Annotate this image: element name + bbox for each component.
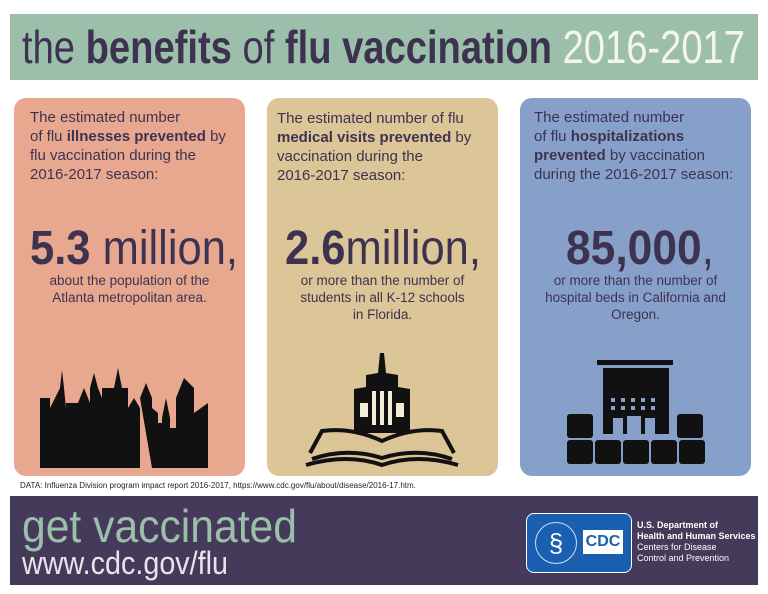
agency text: U.S. Department of — [637, 520, 718, 530]
header banner — [10, 14, 758, 80]
data source note: DATA: Influenza Division program impact report 2016-2017, https://www.cdc.gov/flu/about/disease/2016-17.htm. — [20, 481, 416, 490]
call to action and url — [21, 500, 297, 581]
text: hospitalizations question: during the 2016-2017 season: — [534, 166, 733, 183]
text: California comparison: hospital beds in California and — [545, 290, 726, 305]
logo: HHS CDC: CDC — [586, 533, 620, 550]
text: visits question: vaccination during the — [277, 148, 423, 165]
text: hospitalizations question: The estimated number — [534, 109, 684, 126]
text: Florida comparison: or more than the number of — [301, 273, 464, 288]
logo: HHS CDC: § — [549, 528, 563, 558]
logo: HHS CDC — [526, 513, 632, 573]
text: hospitalizations question — [534, 109, 733, 183]
text: visits question — [277, 110, 472, 184]
icon: hospital and beds — [567, 360, 705, 464]
call to action and url: get vaccinated — [22, 500, 297, 552]
stat: 2.6 million: 2.6million, — [285, 222, 481, 275]
panel: medical visits — [267, 98, 498, 476]
text: Atlanta comparison: Atlanta metropolitan area. — [52, 290, 207, 305]
text: hospitalizations question: of flu hospitalizations — [534, 128, 684, 145]
panel: hospitalizations — [520, 98, 751, 476]
text: visits question: 2016-2017 season: — [277, 167, 405, 184]
agency text: Centers for Disease — [637, 542, 717, 552]
text: Atlanta comparison — [50, 273, 209, 305]
text: Florida comparison: students in all K-12 schools — [300, 290, 465, 305]
agency text: Health and Human Services — [637, 531, 756, 541]
text: visits question: The estimated number of flu — [277, 110, 464, 127]
text: illnesses question: 2016-2017 season: — [30, 166, 158, 183]
agency text — [637, 520, 756, 563]
call to action and url: www.cdc.gov/flu — [21, 545, 228, 581]
stat: 85,000: 85,000, — [566, 222, 714, 275]
text: Florida comparison: in Florida. — [353, 307, 412, 322]
text: visits question: medical visits prevented by — [277, 129, 471, 146]
panel: illnesses — [14, 98, 245, 476]
text: illnesses question — [30, 109, 226, 183]
agency text: Control and Prevention — [637, 553, 729, 563]
text: Florida comparison — [300, 273, 465, 322]
text: illnesses question: of flu illnesses prevented by — [30, 128, 226, 145]
text: Atlanta comparison: about the population of the — [50, 273, 209, 288]
icon: school and book — [306, 353, 458, 468]
footer banner — [10, 496, 758, 585]
text: California comparison: Oregon. — [611, 307, 660, 322]
icon: city skyline — [40, 368, 208, 468]
text: illnesses question: flu vaccination during the — [30, 147, 196, 164]
text: California comparison — [545, 273, 726, 322]
text: illnesses question: The estimated number — [30, 109, 180, 126]
text: hospitalizations question: prevented by vaccination — [534, 147, 705, 164]
text: California comparison: or more than the number of — [554, 273, 717, 288]
